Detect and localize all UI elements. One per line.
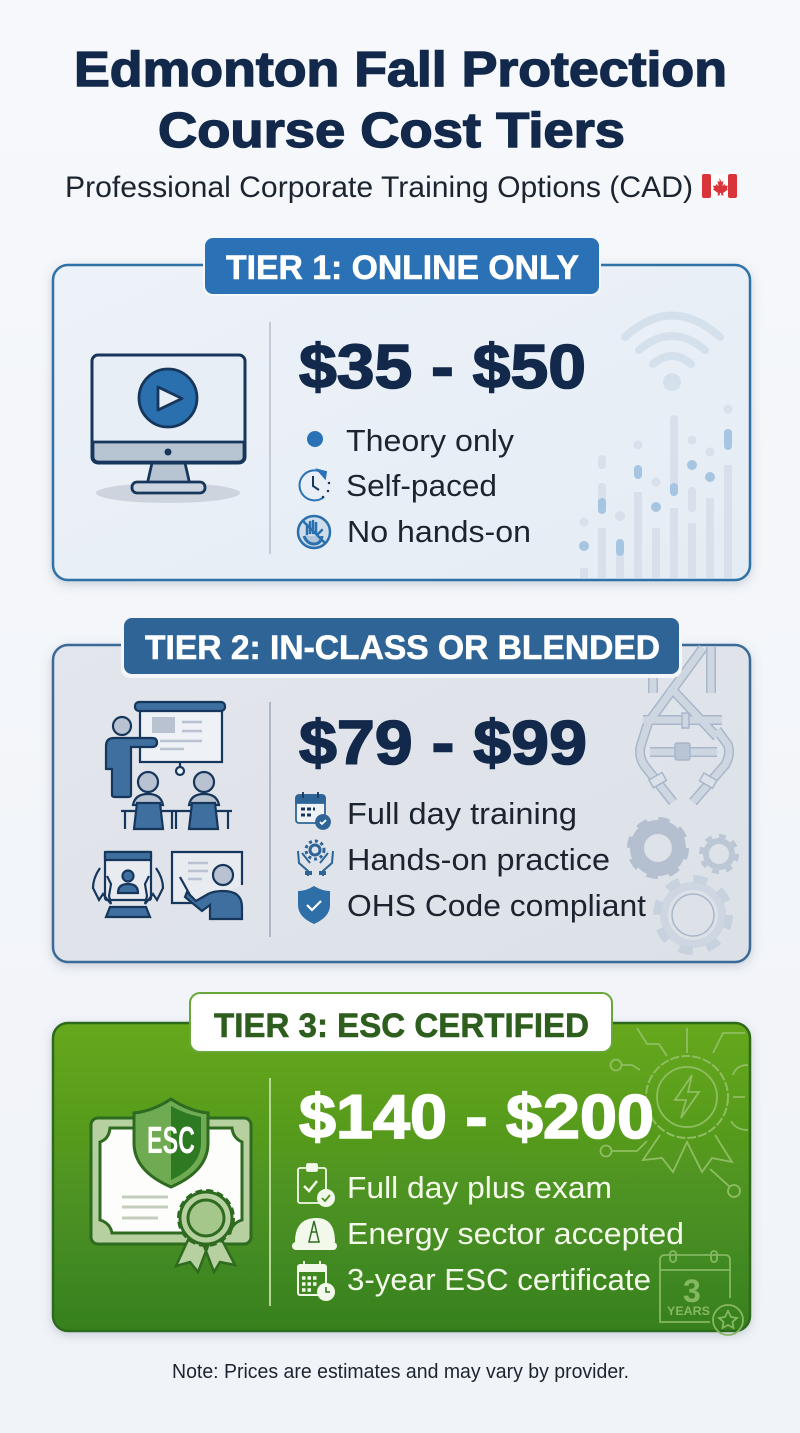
background art: 3 years calendar [660,1251,743,1335]
heading badge [190,993,612,1052]
icon: classroom with instructor and students [106,702,232,829]
shield badge [134,1099,208,1187]
icon: calendar with clock [298,1261,335,1301]
panel background [53,1023,750,1331]
background art: energy award with circuit lines [600,1028,748,1197]
panel: tier 1 online only [53,236,750,580]
feature: self-paced: Self-paced [346,468,497,503]
background art: wifi signal [625,316,720,391]
divider [269,322,271,554]
icon: ESC certificate [91,1099,251,1272]
feature: OHS Code compliant: OHS Code compliant [347,888,646,923]
icon: bullet [307,431,323,447]
feature list [296,792,646,924]
icon: calendar check [296,792,330,829]
panel: tier 2 in-class or blended [53,615,750,962]
shield badge: ESC [147,1120,195,1162]
title: Edmonton Fall Protection [74,43,727,97]
heading badge [121,615,682,678]
icon: Canadian flag [702,174,737,198]
divider [269,1078,271,1306]
icon: no hands-on [298,516,330,548]
divider [269,702,271,937]
background art: safety harness [640,647,729,802]
background art: gears [630,820,737,951]
icon: shield check [298,886,330,924]
feature list [292,1164,684,1301]
icon: hard hat with oil rig [292,1218,337,1250]
price: $79 - $99 [299,709,587,778]
feature: theory only: Theory only [346,423,515,458]
background art: 3 years calendar: 3 [683,1273,701,1309]
footnote: Note: Prices are estimates and may vary by provider. [172,1361,629,1383]
icon: exam clipboard [298,1164,335,1207]
feature: 3-year ESC certificate: 3-year ESC certificate [347,1262,651,1297]
feature: hands-on practice: Hands-on practice [347,842,610,877]
background art: data bars [579,404,732,578]
title [74,43,727,158]
rosette and ribbons [176,1190,235,1272]
heading badge [203,236,601,296]
panel background [53,265,750,580]
icon: computer monitor with play button [92,355,245,503]
heading badge: TIER 2: IN-CLASS OR BLENDED [145,629,660,667]
feature: full day plus exam: Full day plus exam [347,1170,612,1205]
icon: hands with gear [298,841,333,876]
price: $35 - $50 [299,333,586,402]
heading badge: TIER 3: ESC CERTIFIED [214,1007,589,1045]
feature: full day training: Full day training [347,796,577,831]
icon: self-paced clock [300,470,329,500]
title: Course Cost Tiers [158,104,625,158]
icon: tablet held in hands [93,852,163,917]
heading badge: TIER 1: ONLINE ONLY [226,249,579,287]
background art: 3 years calendar: YEARS [667,1304,710,1318]
price: $140 - $200 [299,1083,654,1152]
feature: no hands-on: No hands-on [347,514,531,549]
feature: energy sector accepted: Energy sector accepted [347,1216,684,1251]
panel background [53,645,750,962]
feature list [298,423,531,549]
icon: online instructor [172,852,242,919]
panel: tier 3 ESC certified [53,993,750,1335]
subtitle: Professional Corporate Training Options (CAD) [65,171,693,204]
